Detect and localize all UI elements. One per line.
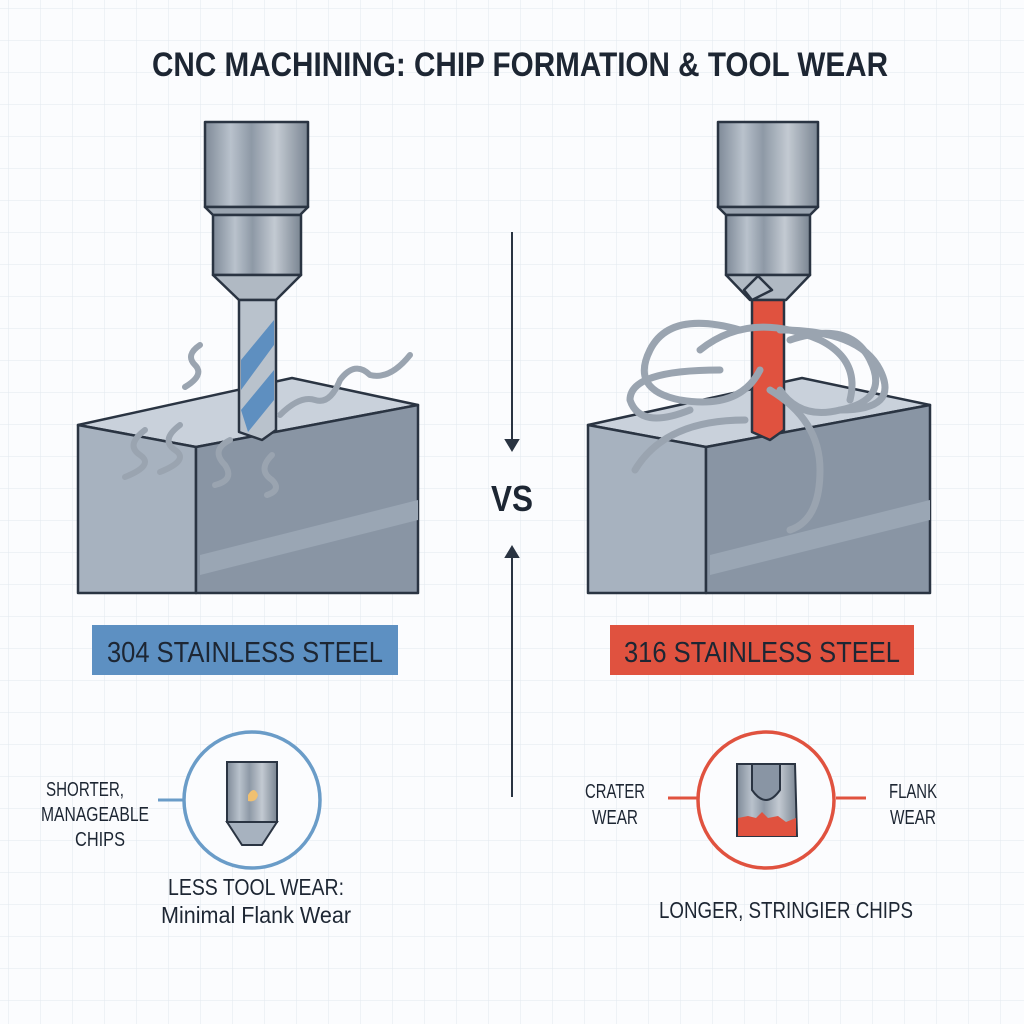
- panel: 316 right illustration: [588, 122, 930, 593]
- text: flank wear: WEAR: [890, 807, 936, 829]
- tool: left: [205, 122, 308, 440]
- label: 304 stainless steel: [92, 625, 398, 675]
- chips: left: [125, 345, 410, 495]
- text: shorter manageable chips: SHORTER,: [46, 779, 124, 801]
- tool: right: [718, 122, 818, 440]
- icon: right wear circle: [668, 732, 866, 868]
- vs label: VS: [491, 478, 533, 519]
- block: left: [78, 378, 418, 593]
- label: 316 stainless steel: [610, 625, 914, 675]
- text: less tool wear: LESS TOOL WEAR:: [168, 874, 344, 900]
- text: flank wear: FLANK: [889, 781, 937, 803]
- title: CNC MACHINING: CHIP FORMATION & TOOL WEAR: [152, 46, 888, 84]
- text: longer stringier chips: LONGER, STRINGIER CHIPS: [659, 897, 913, 923]
- panel: 304 left illustration: [78, 122, 418, 593]
- chips: right tangled: [630, 323, 885, 530]
- divider: vs arrows: [506, 232, 518, 797]
- label: 304 stainless steel: 304 STAINLESS STEEL: [107, 637, 383, 669]
- icon: left wear circle: [158, 732, 320, 868]
- text: crater wear: WEAR: [592, 807, 638, 829]
- text: crater wear: CRATER: [585, 781, 645, 803]
- text: shorter manageable chips: CHIPS: [75, 829, 125, 851]
- label: 316 stainless steel: 316 STAINLESS STEEL: [624, 637, 900, 669]
- block: right: [588, 378, 930, 593]
- text: less tool wear: Minimal Flank Wear: [161, 902, 351, 928]
- text: shorter manageable chips: MANAGEABLE: [41, 804, 149, 826]
